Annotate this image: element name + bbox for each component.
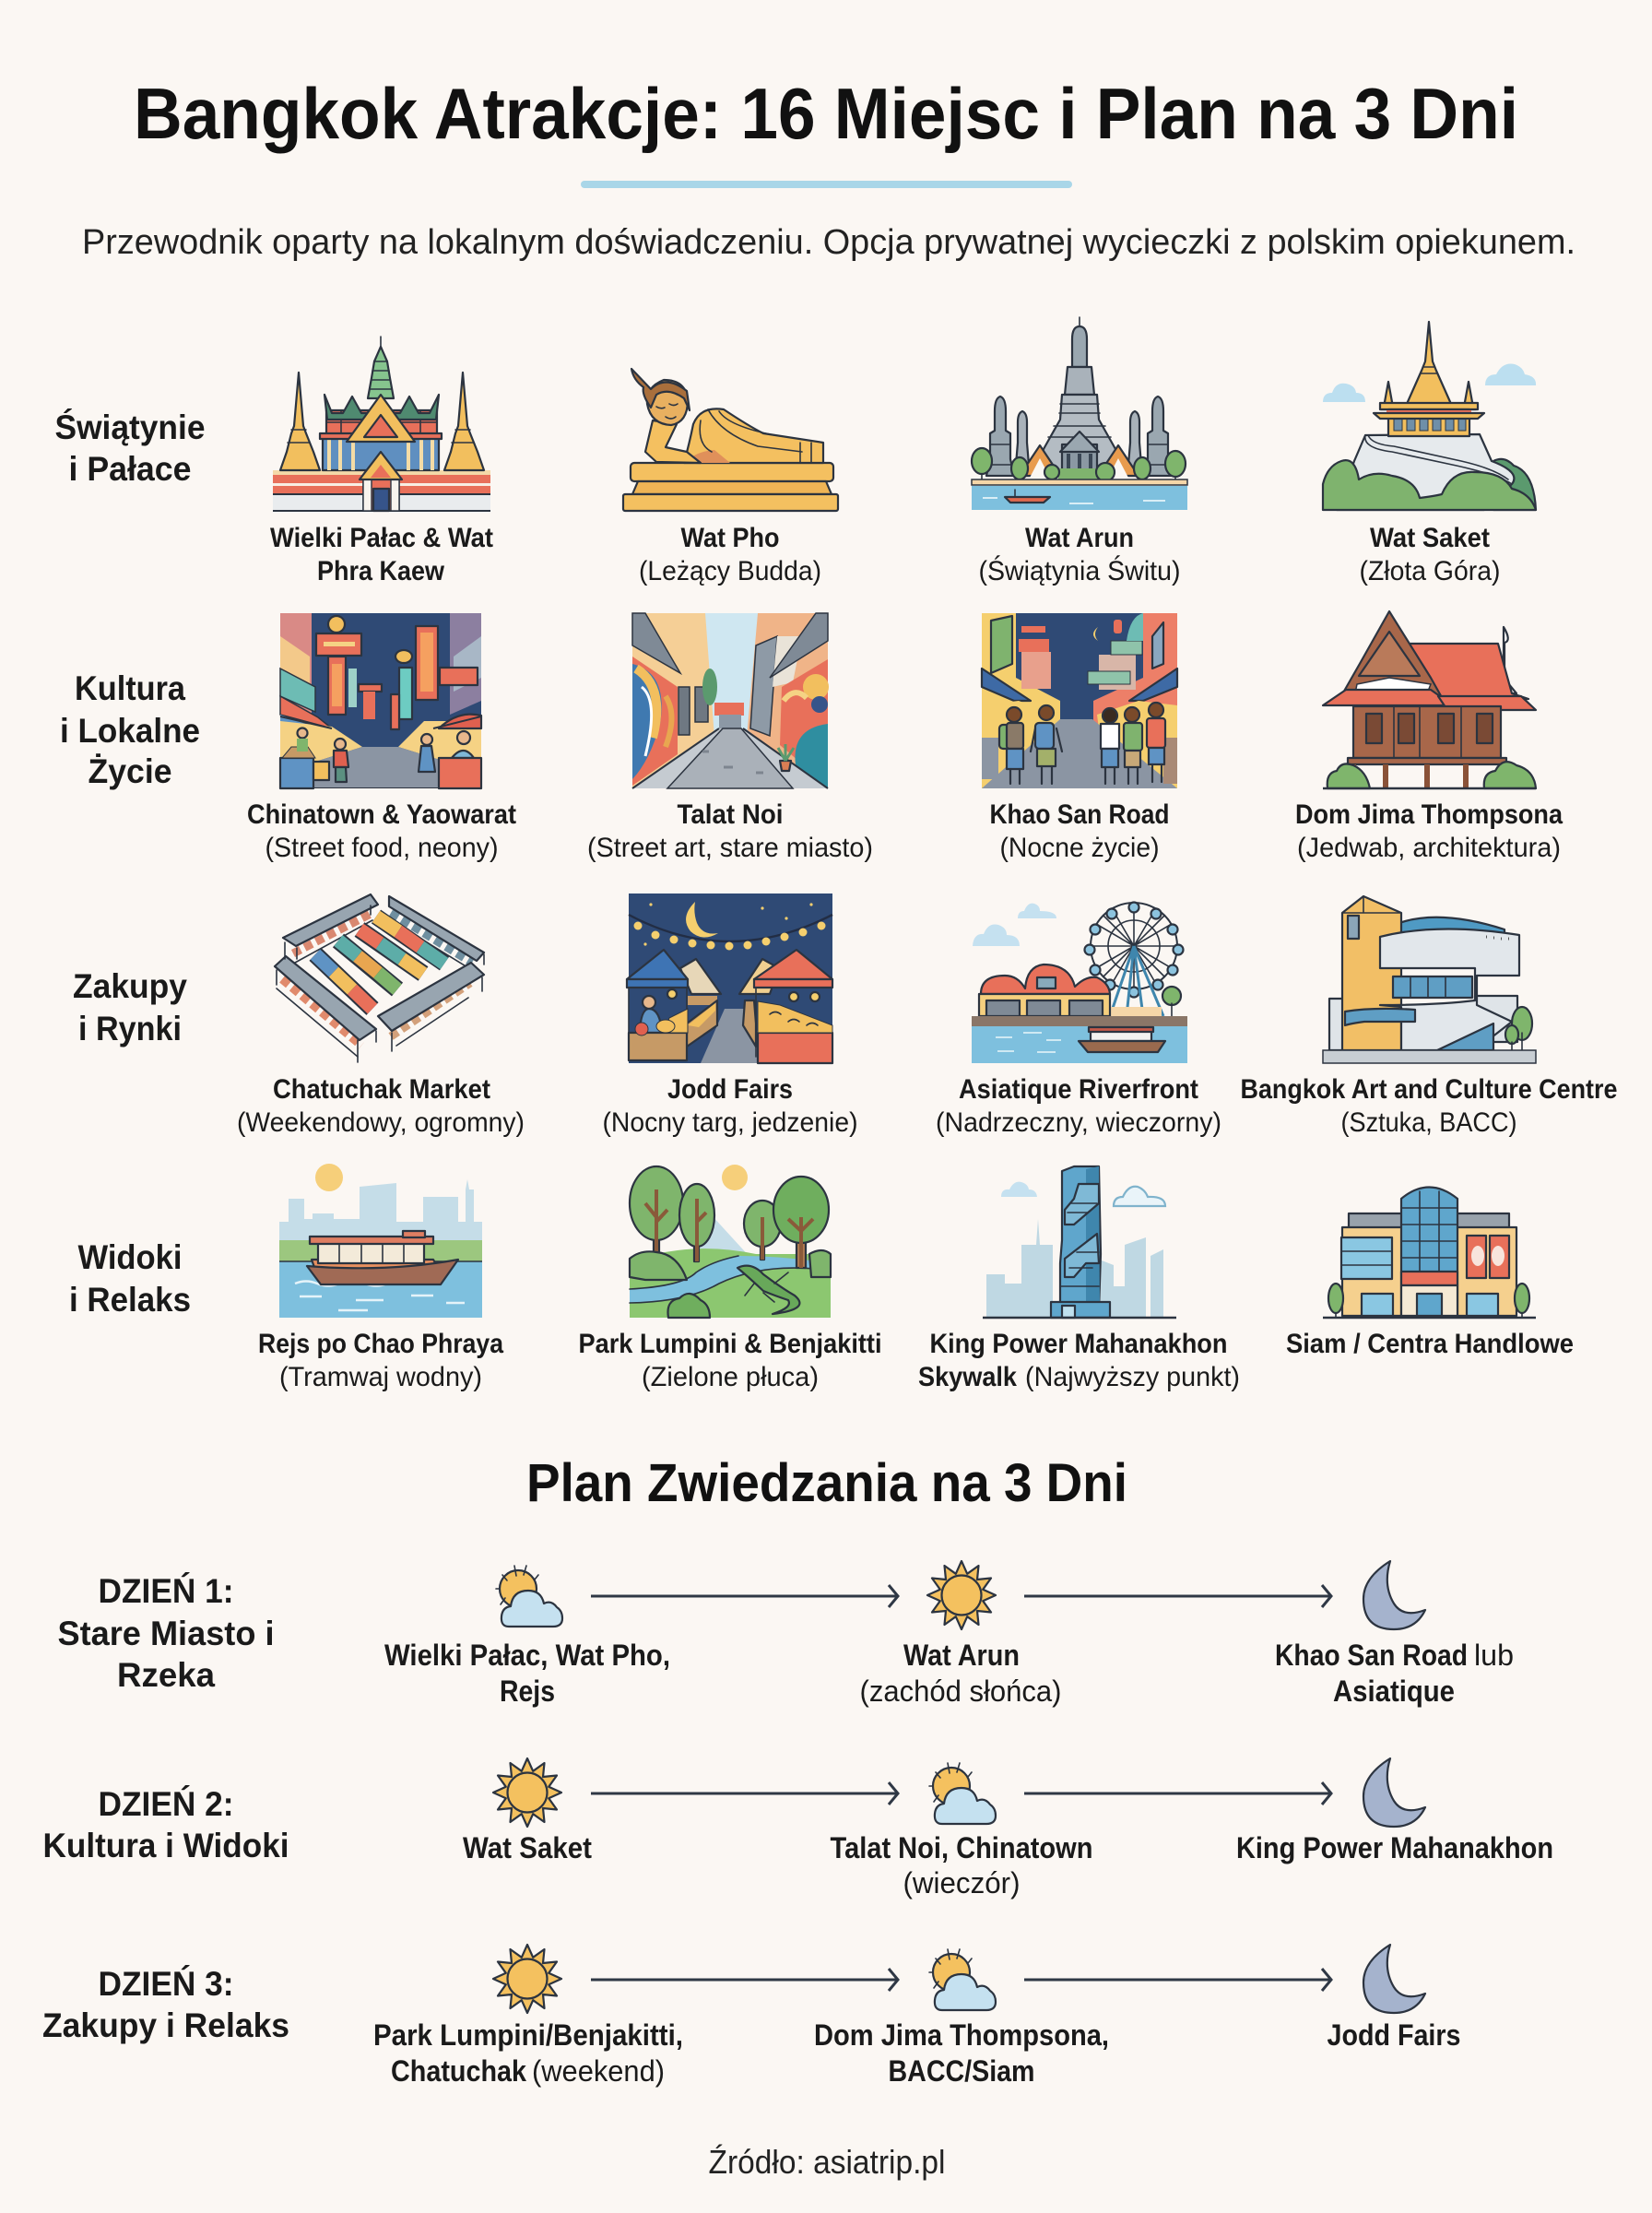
day 3 heading [42,1965,289,2044]
icon: moon [1363,1758,1425,1827]
label: Khao San Road lub Asiatique [1275,1639,1514,1708]
icon: moon [1363,1945,1425,2013]
label: Asiatique Riverfront: Asiatique Riverfront [959,1074,1198,1105]
day 1 heading: Stare Miasto i [57,1615,275,1652]
label: Dom Jima Thompsona: Dom Jima Thompsona [1295,799,1563,830]
icon: sun [493,1945,561,2013]
label: Wielki Pałac, Wat Pho, Rejs: Wielki Pałac, Wat Pho, [384,1639,670,1672]
day 2 heading [42,1785,289,1864]
label: Khao San Road lub Asiatique: lub [1474,1639,1514,1672]
label: Jodd Fairs [603,1074,857,1138]
arrow [1024,1969,1331,1991]
label: Dom Jima Thompsona [1295,799,1563,863]
footer source: Źródło: asiatrip.pl [708,2143,946,2181]
label: Chatuchak Market: (Weekendowy, ogromny) [237,1107,525,1138]
icon: Chao Phraya boat [279,1164,482,1318]
label: Khao San Road lub Asiatique: Khao San Road [1275,1639,1468,1672]
category: Widoki i Relaks [69,1238,191,1319]
icon: Wat Arun [972,317,1187,510]
label: Wielki Pałac, Wat Pho, Rejs: Rejs [500,1675,555,1708]
label: Rejs po Chao Phraya: Rejs po Chao Phraya [258,1329,503,1359]
label: Park Lumpini/Benjakitti, Chatuchak (weekend): (weekend) [532,2054,665,2088]
label: King Power Mahanakhon: King Power Mahanakhon [1236,1831,1553,1864]
icon: sun [493,1758,561,1827]
icon: Jodd Fairs [627,893,832,1063]
day 1 heading: DZIEŃ 1: [98,1572,234,1610]
label: Wielki Pałac & Wat Phra Kaew: Wielki Pałac & Wat [270,523,493,553]
label: Wat Arun [979,523,1180,586]
arrow [1024,1782,1331,1805]
label: Dom Jima Thompsona, BACC/Siam [814,2018,1109,2088]
label: Talat Noi, Chinatown (wieczór): (wieczór) [903,1866,1020,1899]
label: Wielki Pałac & Wat Phra Kaew [270,523,493,586]
label: Asiatique Riverfront [936,1074,1221,1138]
label: Wielki Pałac, Wat Pho, Rejs [384,1639,670,1708]
label: Park Lumpini & Benjakitti: Park Lumpini & Benjakitti [579,1329,881,1359]
heading: plan: Plan Zwiedzania na 3 Dni [526,1453,1127,1513]
label: Chinatown & Yaowarat: Chinatown & Yaowarat [247,799,516,830]
icon: afternoon partly cloudy [929,1949,996,2010]
label: Bangkok Art and Culture Centre: (Sztuka, BACC) [1340,1107,1517,1138]
icon: Talat Noi [632,613,829,788]
label: King Power Mahanakhon Skywalk: Skywalk [918,1362,1017,1392]
label: Bangkok Art and Culture Centre [1241,1074,1617,1138]
icon: Chatuchak Market [275,894,484,1062]
label: Wat Pho [639,523,821,586]
category: Kultura i Lokalne Życie: Życie [88,752,171,790]
label: Wat Arun (zachód słońca) [859,1639,1062,1708]
label: Talat Noi, Chinatown (wieczór): Talat Noi, Chinatown [830,1831,1093,1864]
label: Jodd Fairs: (Nocny targ, jedzenie) [603,1107,857,1138]
label: Talat Noi [587,799,873,863]
category: Kultura i Lokalne Życie: i Lokalne [60,712,200,750]
label: Park Lumpini & Benjakitti: (Zielone płuca) [642,1362,819,1392]
icon: sun [927,1561,996,1629]
label: Khao San Road lub Asiatique: Asiatique [1333,1675,1455,1708]
label: Park Lumpini/Benjakitti, Chatuchak (weekend): Chatuchak [391,2054,527,2088]
label: Park Lumpini/Benjakitti, Chatuchak (weekend) [373,2018,683,2088]
label: Khao San Road: (Nocne życie) [999,833,1160,863]
icon: moon [1363,1561,1425,1629]
label: Wat Pho: Wat Pho [680,523,780,553]
label: Rejs po Chao Phraya: (Tramwaj wodny) [279,1362,482,1392]
day 2 heading: Kultura i Widoki [42,1827,289,1864]
label: Talat Noi: (Street art, stare miasto) [587,833,873,863]
label: Chatuchak Market [237,1074,525,1138]
label: Wat Saket: (Złota Góra) [1359,556,1501,586]
day 1 heading: Rzeka [117,1656,215,1694]
label: Talat Noi: Talat Noi [677,799,784,830]
arrow [591,1969,898,1991]
title: Bangkok Atrakcje: 16 Miejsc i Plan na 3 Dni [134,73,1518,154]
label: Wat Arun: Wat Arun [1025,523,1134,553]
label: Talat Noi, Chinatown (wieczór) [830,1831,1093,1899]
category: Zakupy i Rynki: i Rynki [78,1010,182,1047]
label: Wat Arun (zachód słońca): (zachód słońca) [859,1675,1062,1708]
label: Dom Jima Thompsona, BACC/Siam: Dom Jima Thompsona, [814,2018,1109,2052]
day 3 heading: DZIEŃ 3: [98,1965,234,2003]
label: Jodd Fairs: Jodd Fairs [667,1074,793,1105]
label: Dom Jima Thompsona, BACC/Siam: BACC/Siam [889,2054,1034,2088]
day 2 heading: DZIEŃ 2: [98,1785,234,1823]
label: Rejs po Chao Phraya [258,1329,503,1392]
icon: afternoon partly cloudy [929,1763,996,1824]
icon: Siam shopping mall [1323,1188,1536,1318]
category: Kultura i Lokalne Życie [60,669,200,790]
icon: Khao San Road [982,613,1177,788]
label: Park Lumpini/Benjakitti, Chatuchak (weekend): Park Lumpini/Benjakitti, [373,2018,683,2052]
category: Zakupy i Rynki [73,967,187,1047]
label: Wat Pho: (Leżący Budda) [639,556,821,586]
icon: Wat Saket [1323,322,1536,510]
arrow [1024,1585,1331,1607]
label: King Power Mahanakhon Skywalk [918,1329,1240,1392]
label: Wielki Pałac & Wat Phra Kaew: Phra Kaew [317,556,445,586]
label: Chinatown & Yaowarat: (Street food, neony) [266,833,498,863]
icon: Lumpini Park [630,1165,831,1318]
label: Siam / Centra Handlowe: Siam / Centra Handlowe [1286,1329,1574,1359]
label: Wat Saket [1359,523,1501,586]
day 1 heading [57,1572,275,1694]
label: Park Lumpini & Benjakitti [579,1329,881,1392]
category: Zakupy i Rynki: Zakupy [73,967,187,1005]
category: Świątynie i Pałace: Świątynie [55,408,205,446]
icon: Chinatown [280,613,481,788]
icon: Asiatique Riverfront [972,902,1187,1063]
category: Widoki i Relaks: Widoki [77,1238,183,1276]
label: King Power Mahanakhon Skywalk: King Power Mahanakhon [929,1329,1228,1359]
icon: Jim Thompson House [1323,611,1536,788]
label: Wat Arun: (Świątynia Świtu) [979,555,1180,586]
label: Dom Jima Thompsona: (Jedwab, architektura) [1297,833,1561,863]
arrow [591,1585,898,1607]
label: Bangkok Art and Culture Centre: Bangkok Art and Culture Centre [1241,1074,1617,1105]
label: Khao San Road: Khao San Road [990,799,1169,830]
label: Wat Saket: Wat Saket [1370,523,1490,553]
label: Wat Arun (zachód słońca): Wat Arun [903,1639,1020,1672]
label: Wat Saket: Wat Saket [463,1831,592,1864]
label: Chinatown & Yaowarat [247,799,516,863]
label: Khao San Road [990,799,1169,863]
category: Kultura i Lokalne Życie: Kultura [75,669,185,707]
title underline [581,181,1072,188]
label: Chatuchak Market: Chatuchak Market [273,1074,490,1105]
icon: morning partly cloudy [496,1566,562,1627]
subtitle: Przewodnik oparty na lokalnym doświadczeniu. Opcja prywatnej wycieczki z polskim opiekunem. [82,223,1575,262]
arrow [591,1782,898,1805]
label: Asiatique Riverfront: (Nadrzeczny, wieczorny) [936,1107,1221,1138]
day 3 heading: Zakupy i Relaks [42,2006,289,2044]
icon: reclining Buddha [623,369,838,511]
category: Świątynie i Pałace: i Pałace [68,450,192,488]
label: Jodd Fairs: Jodd Fairs [1328,2018,1460,2052]
label: King Power Mahanakhon Skywalk: (Najwyższy punkt) [1025,1362,1240,1392]
icon: Grand Palace [273,337,490,512]
icon: Bangkok Art and Culture Centre [1323,896,1536,1063]
category: Świątynie i Pałace [55,408,205,488]
category: Widoki i Relaks: i Relaks [69,1281,191,1319]
icon: King Power Mahanakhon [983,1166,1176,1318]
